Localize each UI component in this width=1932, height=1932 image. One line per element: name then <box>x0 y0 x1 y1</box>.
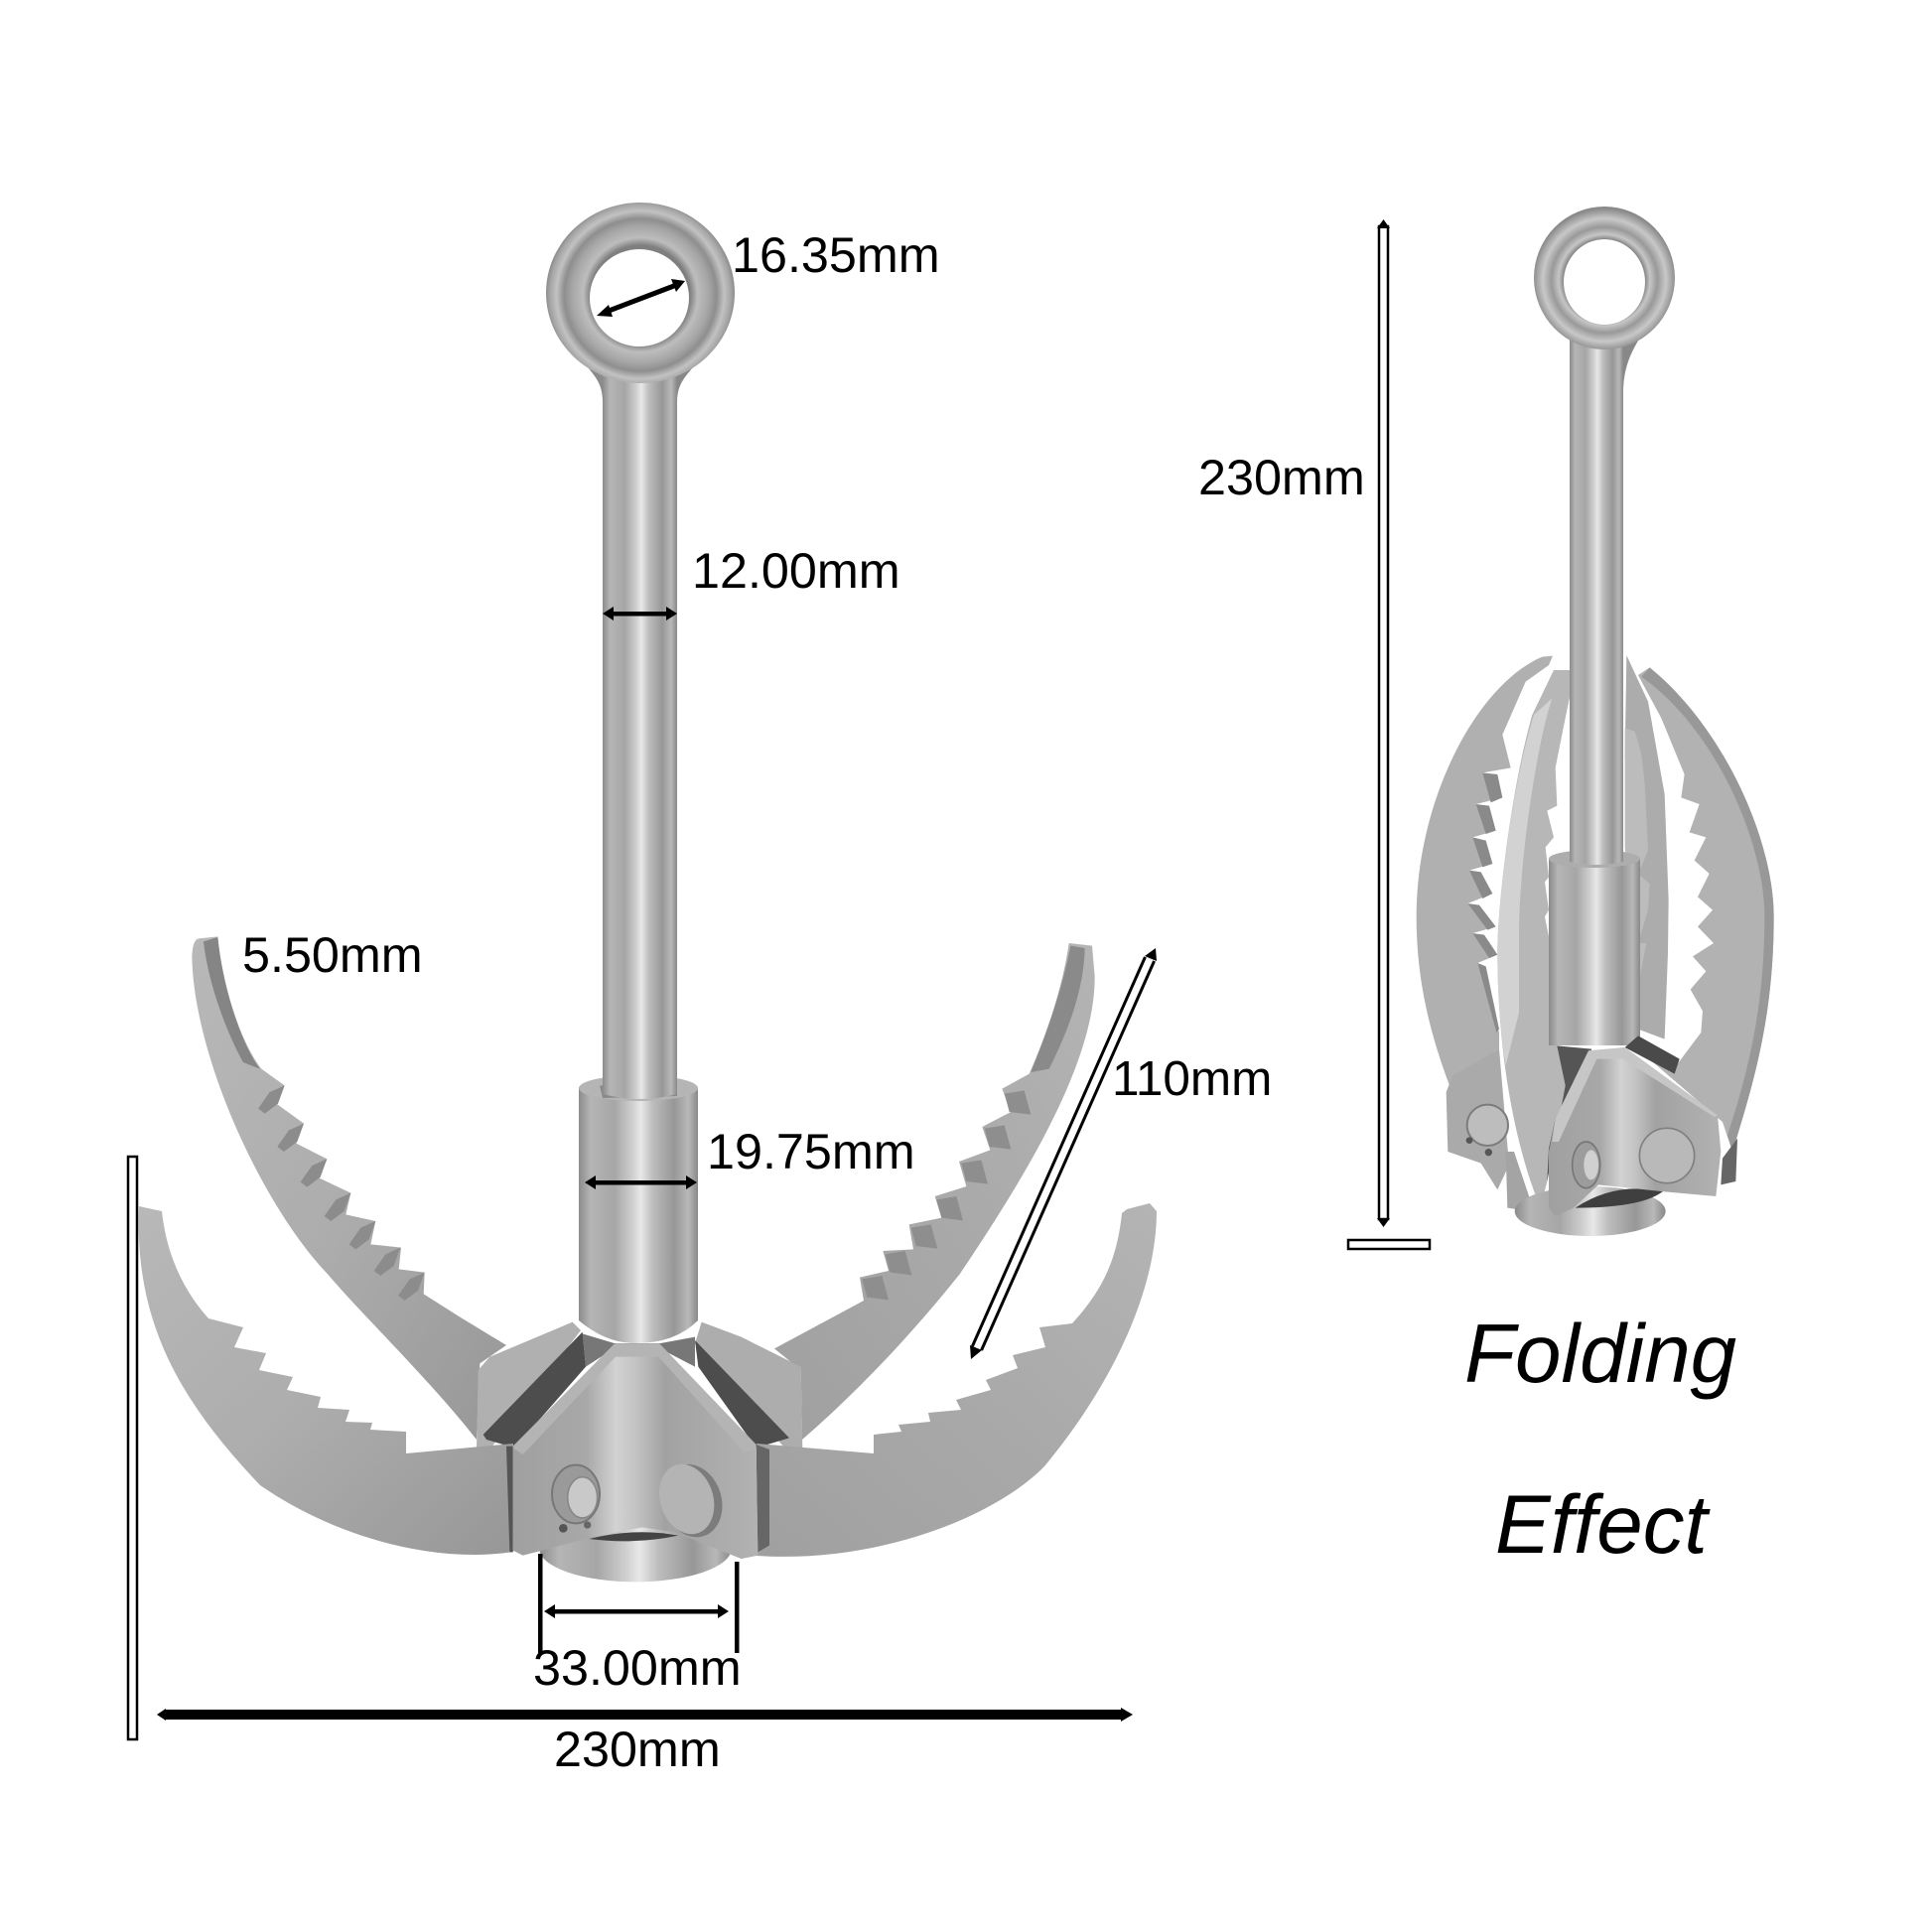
sleeve <box>579 1052 698 1343</box>
weld <box>583 1333 695 1367</box>
arrow: sleeve diameter <box>585 1175 697 1189</box>
folded hub <box>1515 1035 1721 1236</box>
lens claw lower piece <box>1506 1152 1530 1209</box>
folded dark crescent <box>1576 1188 1663 1208</box>
arrow: shaft diameter <box>603 607 677 621</box>
hub cavity left <box>483 1332 586 1448</box>
main anchor, opened <box>139 203 1157 1582</box>
label: 5.50mm: 5.50mm <box>242 926 423 983</box>
base line, folded anchor <box>1348 1240 1430 1249</box>
rear right claw <box>1625 655 1669 1039</box>
eye ring <box>546 203 735 383</box>
lens claw highlight <box>1497 698 1552 1065</box>
folded shaft <box>1570 338 1640 869</box>
front lens claw <box>1497 670 1576 1208</box>
clip pin <box>552 1465 600 1533</box>
folded claws behind shaft <box>1417 655 1774 1209</box>
height arrow, folded anchor <box>1377 219 1390 1227</box>
joint shadows <box>506 1447 514 1552</box>
folded eye ring <box>1534 207 1675 349</box>
dark crescent <box>589 1532 678 1541</box>
folded anchor <box>1417 207 1774 1236</box>
arrow: overall width <box>157 1708 1133 1722</box>
base, pins and front plate <box>506 1344 769 1582</box>
front-right claw <box>757 1203 1157 1557</box>
label: 230mm width: 230mm <box>554 1721 721 1777</box>
left hub plate <box>1447 1049 1509 1189</box>
base cap <box>539 1516 732 1582</box>
plate bevel <box>513 1344 758 1559</box>
plate bevel <box>1552 1047 1718 1142</box>
rear right teeth <box>1625 728 1650 986</box>
hub cavities <box>1547 1045 1591 1181</box>
small hidden plate <box>1721 1139 1737 1184</box>
front-left claw <box>139 1206 513 1555</box>
hub wing right <box>695 1322 802 1449</box>
plate face <box>513 1357 758 1559</box>
label: 33.00mm: 33.00mm <box>533 1639 742 1696</box>
bracket: base diameter <box>538 1554 739 1653</box>
hub cavity right <box>695 1340 789 1448</box>
round pin <box>650 1456 732 1545</box>
hub wing left <box>477 1322 581 1449</box>
label: 110mm: 110mm <box>1112 1051 1272 1106</box>
caption: Folding: Folding <box>1464 1307 1736 1400</box>
label: 16.35mm: 16.35mm <box>732 226 940 283</box>
left claw teeth shading <box>1467 772 1502 1033</box>
back-right claw <box>774 943 1095 1440</box>
shaft <box>584 362 697 1107</box>
folded clip pin <box>1573 1142 1600 1188</box>
label: 12.00mm: 12.00mm <box>692 542 900 599</box>
arrow: eye diameter <box>597 279 685 317</box>
folded round pin <box>1639 1128 1695 1183</box>
right outer claw <box>1638 667 1774 1152</box>
caption: Effect: Effect <box>1495 1477 1711 1571</box>
folded base <box>1515 1186 1666 1236</box>
folded sleeve <box>1549 844 1640 1045</box>
label: 19.75mm: 19.75mm <box>707 1123 915 1179</box>
height bar, open anchor <box>128 1157 137 1739</box>
right claw edge <box>1641 667 1774 1152</box>
label: 230mm height: 230mm <box>1198 449 1365 505</box>
hub <box>477 1322 802 1449</box>
left outer claw <box>1417 656 1553 1085</box>
back-left claw <box>192 936 506 1440</box>
arrow: claw length <box>970 948 1157 1359</box>
folded front plate <box>1549 1047 1721 1216</box>
